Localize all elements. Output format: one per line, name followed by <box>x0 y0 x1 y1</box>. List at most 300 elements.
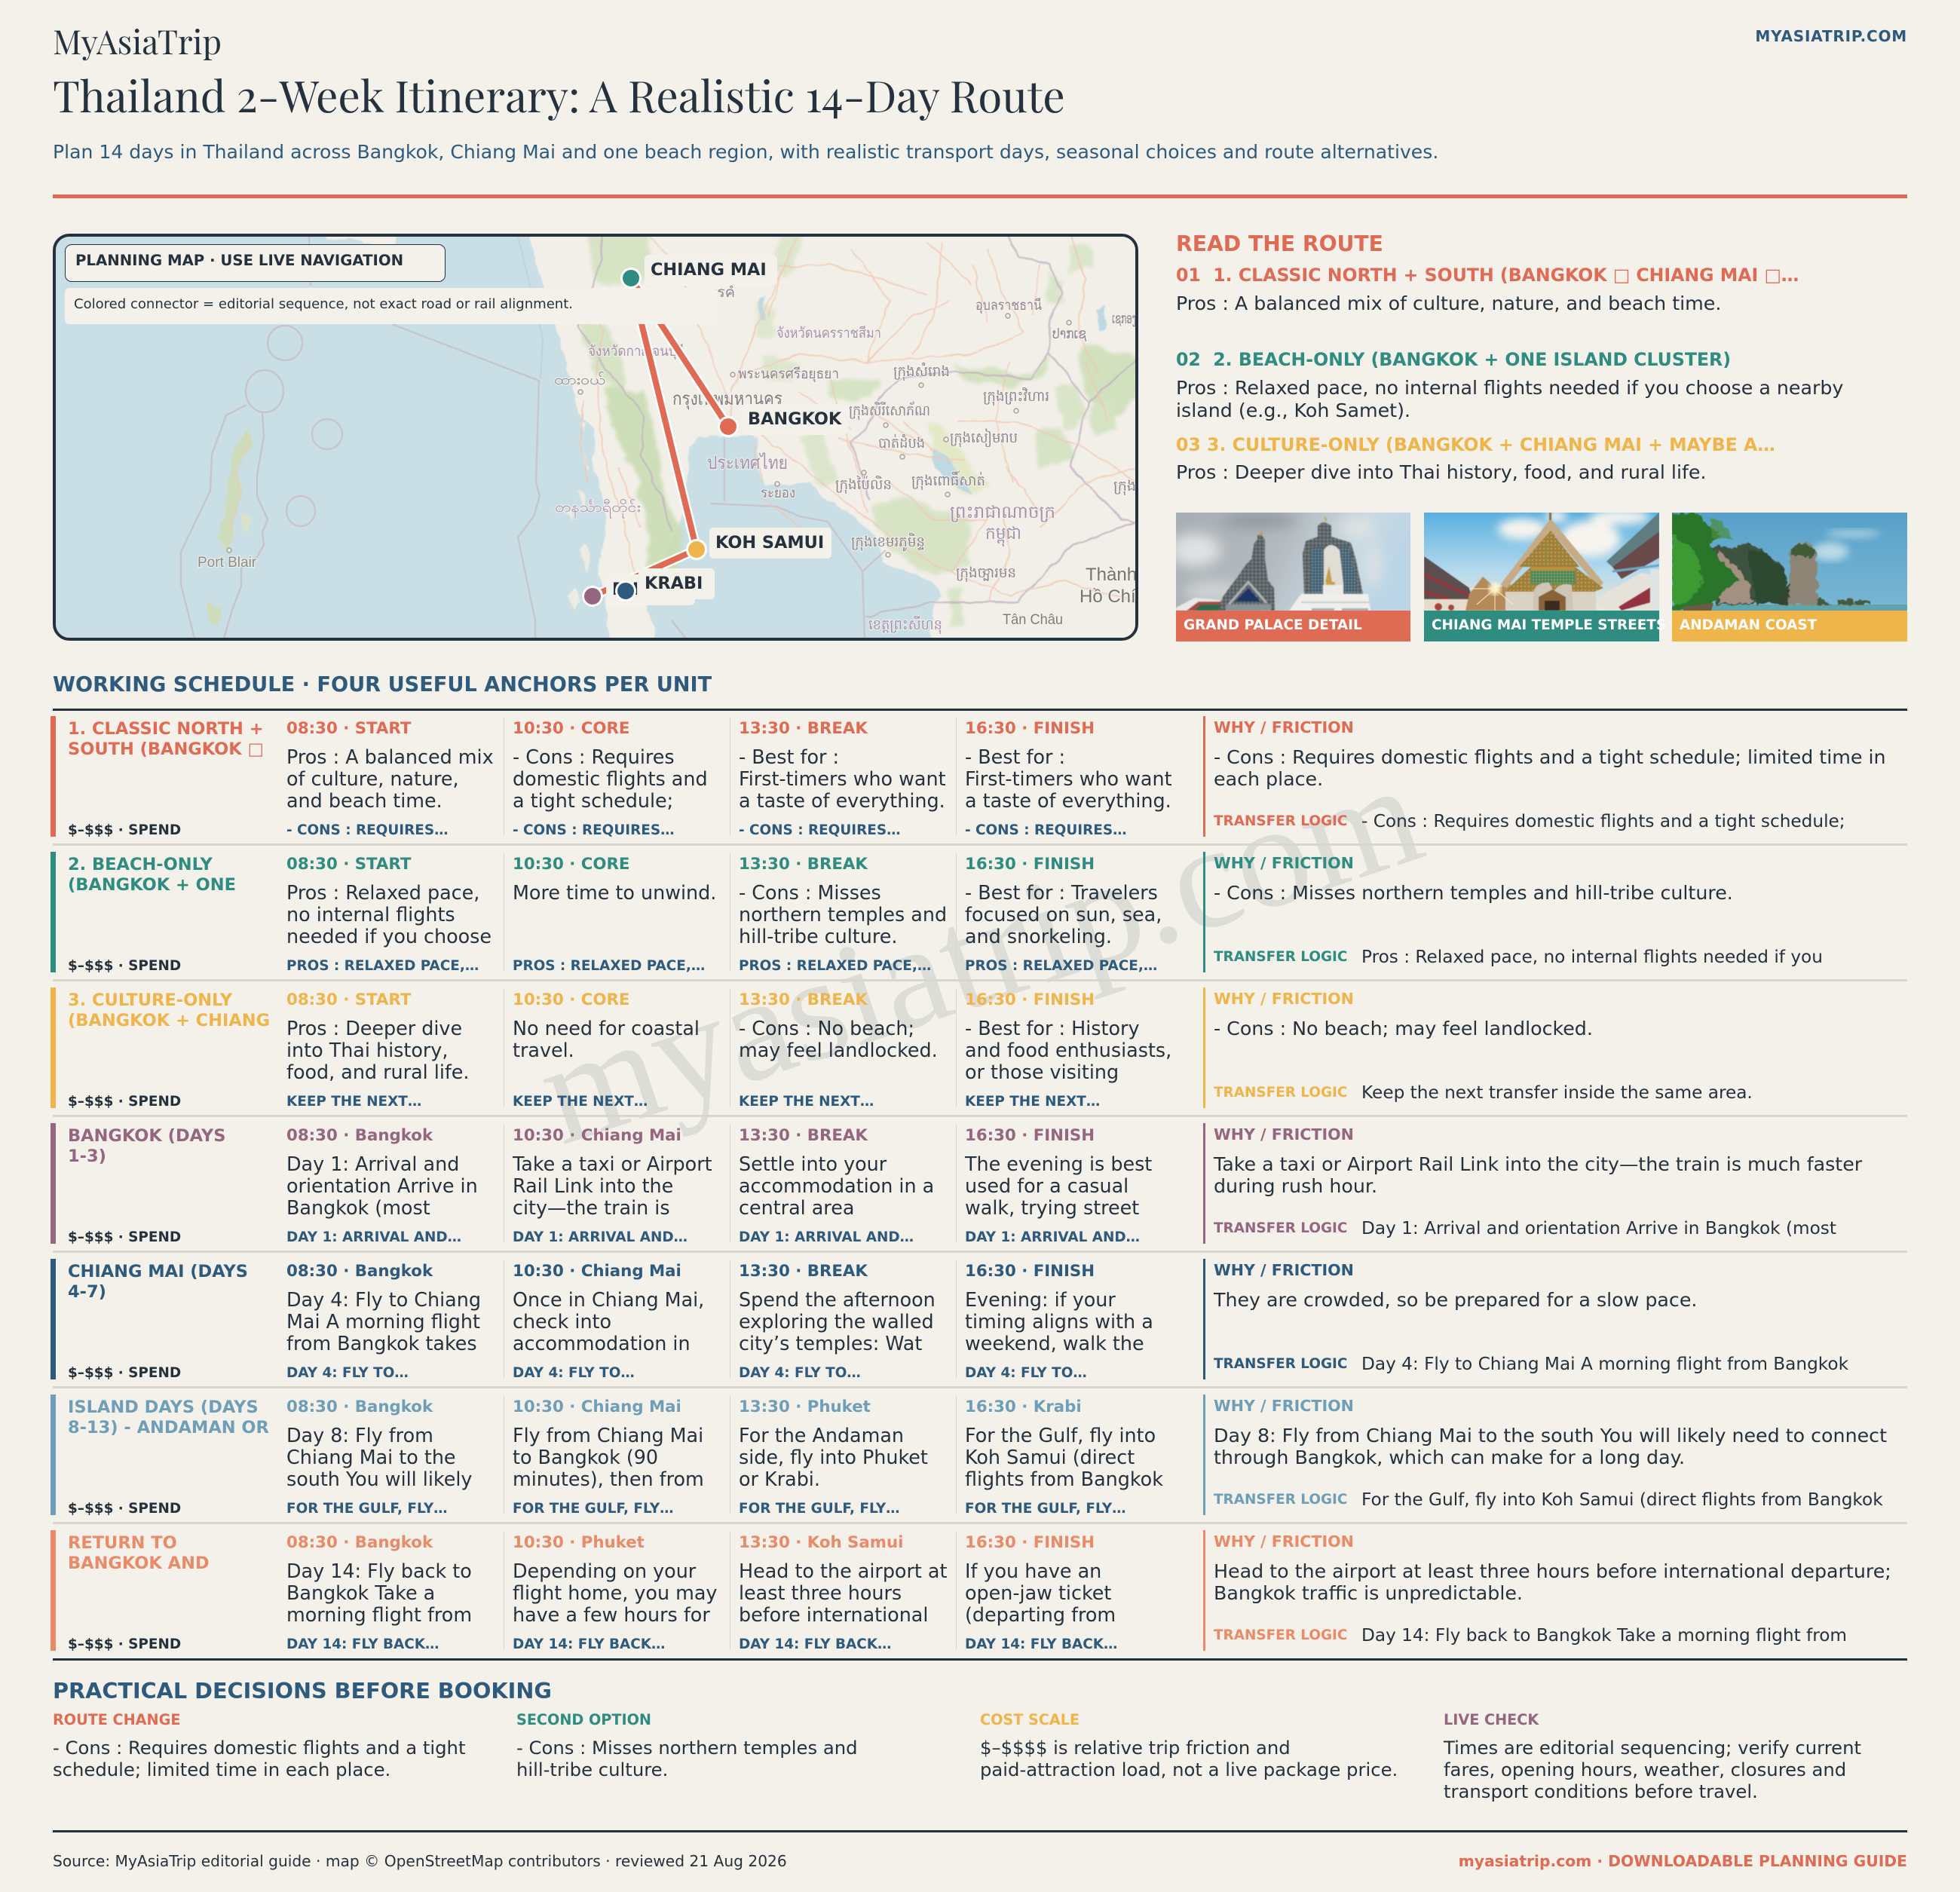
slot 13:30: 13:30 · BREAK <box>739 719 868 738</box>
slot 13:30: - Cons : No beach; <box>739 1017 914 1039</box>
photo card: Grand Palace <box>1176 513 1410 641</box>
schedule row 6 <box>51 1395 1907 1524</box>
why and transfer: Pros : Relaxed pace, no internal flights needed if you <box>1361 947 1823 967</box>
row label <box>68 1533 210 1573</box>
Tonle Sap lake and reservoirs <box>760 296 1107 494</box>
place names: ក្រុងសៀមរាប <box>950 428 1018 448</box>
slot 16:30: and snorkeling. <box>965 925 1112 948</box>
stop marker: Bangkok <box>718 416 739 437</box>
slot 10:30: Take a taxi or Airport <box>513 1153 712 1175</box>
slot 08:30: Bangkok (most <box>286 1196 430 1219</box>
slot 08:30: Mai A morning flight <box>286 1310 480 1333</box>
slot 13:30: city’s temples: Wat <box>739 1332 922 1355</box>
slot 16:30: PROS : RELAXED PACE,… <box>965 958 1157 974</box>
why and transfer: Day 1: Arrival and orientation Arrive in Bangkok (most <box>1361 1218 1836 1238</box>
schedule row 4 <box>51 1123 1907 1253</box>
slot 10:30 <box>504 1396 730 1514</box>
slot 13:30: before international <box>739 1603 928 1626</box>
row label: (BANGKOK + ONE <box>68 875 236 895</box>
slot 10:30: minutes), then from <box>513 1468 704 1490</box>
slot 08:30 <box>286 1126 478 1245</box>
row label <box>68 1126 225 1166</box>
slot 10:30: FOR THE GULF, FLY… <box>513 1501 674 1517</box>
schedule top rule <box>53 709 1907 710</box>
slot 08:30: Pros : Relaxed pace, <box>286 881 479 904</box>
slot 16:30: - CONS : REQUIRES… <box>965 822 1126 838</box>
slot 16:30 <box>956 1260 1182 1378</box>
header: site url: MYASIATRIP.COM <box>1755 27 1907 45</box>
row label: RETURN TO <box>68 1533 177 1553</box>
stop label: Koh Samui: KOH SAMUI <box>715 533 824 553</box>
schedule row 7 <box>51 1530 1891 1652</box>
slot 16:30: timing aligns with a <box>965 1310 1153 1333</box>
schedule row 3 <box>51 987 1907 1117</box>
slot 10:30: 10:30 · CORE <box>513 855 629 874</box>
slot 08:30: 08:30 · Bangkok <box>286 1398 433 1416</box>
slot 08:30: Chiang Mai to the <box>286 1446 456 1468</box>
land <box>207 219 1153 656</box>
row accent <box>51 987 56 1108</box>
photo: gilded temple facade under blue sky <box>1424 513 1659 611</box>
why and transfer: Take a taxi or Airport Rail Link into the city—the train is much faster <box>1214 1153 1862 1175</box>
slot 08:30: morning flight from <box>286 1603 472 1626</box>
slot 16:30: a taste of everything. <box>965 789 1171 812</box>
why and transfer: TRANSFER LOGIC <box>1214 1220 1347 1236</box>
stop label: Chiang Mai: CHIANG MAI <box>651 260 767 280</box>
slot 10:30: 10:30 · Chiang Mai <box>513 1126 681 1145</box>
place names: ປາກເຊ <box>1052 326 1087 342</box>
row accent <box>51 1259 56 1379</box>
slot 10:30: Fly from Chiang Mai <box>513 1424 703 1447</box>
slot 16:30 <box>956 718 1182 835</box>
why and transfer: TRANSFER LOGIC <box>1214 1356 1347 1372</box>
place names: Hồ Chí <box>1080 586 1136 607</box>
decision: cost scale: $–$$$$ is relative trip friction and <box>980 1737 1291 1759</box>
slot 16:30: DAY 4: FLY TO… <box>965 1365 1087 1381</box>
slot 16:30: KEEP THE NEXT… <box>965 1094 1100 1110</box>
slot 13:30: central area <box>739 1196 854 1219</box>
place names: พระนครศรีอยุธยา <box>738 366 839 383</box>
slot 10:30: Once in Chiang Mai, <box>513 1288 704 1311</box>
slot 16:30: 16:30 · FINISH <box>965 855 1095 874</box>
forest patches <box>578 226 1138 626</box>
row spend: $–$$$ · SPEND <box>68 1636 181 1652</box>
slot 10:30 <box>504 853 730 971</box>
decision: live check: fares, opening hours, weather, closures and <box>1444 1759 1846 1780</box>
place names: Thành <box>1086 565 1137 585</box>
map note: planning map tag <box>65 244 446 282</box>
subtitle: Plan 14 days in Thailand across Bangkok, Chiang Mai and one beach region, with realistic transport days, seasonal choices and route alternatives. <box>53 141 1438 163</box>
row label: BANGKOK (DAYS <box>68 1126 225 1146</box>
row label: 2. BEACH-ONLY <box>68 855 213 874</box>
slot 08:30 <box>286 719 494 838</box>
row label <box>68 719 264 759</box>
why and transfer: WHY / FRICTION <box>1214 990 1354 1008</box>
slot 08:30: south You will likely <box>286 1468 472 1490</box>
stop marker: Phuket <box>582 586 603 607</box>
slot 16:30: Evening: if your <box>965 1288 1116 1311</box>
slot 13:30: DAY 1: ARRIVAL AND… <box>739 1229 914 1245</box>
decision: route change: - Cons : Requires domestic flights and a tight <box>53 1737 466 1759</box>
slot 16:30: flights from Bangkok <box>965 1468 1163 1490</box>
row spend: $–$$$ · SPEND <box>68 822 181 838</box>
slot 13:30 <box>730 1125 956 1242</box>
decision: cost scale: COST SCALE <box>980 1711 1080 1728</box>
decision: live check <box>1443 1711 1861 1802</box>
slot 08:30 <box>286 855 492 974</box>
slot 10:30: to Bangkok (90 <box>513 1446 658 1468</box>
place names: ระยอง <box>761 485 795 501</box>
caption: CHIANG MAI TEMPLE STREETS <box>1432 617 1666 633</box>
place names: ក្រុងសំរោង <box>893 362 950 381</box>
slot 08:30: Day 14: Fly back to <box>286 1560 472 1582</box>
place names: ក្រុងសិរីសោភ័ណ <box>849 401 930 421</box>
why and transfer: WHY / FRICTION <box>1214 1125 1354 1143</box>
slot 13:30: - CONS : REQUIRES… <box>739 822 900 838</box>
slot 16:30: DAY 1: ARRIVAL AND… <box>965 1229 1140 1245</box>
slot 16:30: If you have an <box>965 1560 1101 1582</box>
place names: ក្រុងប៉ៃលិន <box>835 475 892 494</box>
route 1 text: Pros : A balanced mix of culture, nature, and beach time. <box>1176 292 1721 314</box>
slot 16:30: focused on sun, sea, <box>965 903 1162 926</box>
decision: live check: LIVE CHECK <box>1444 1711 1539 1728</box>
slot 08:30: Day 4: Fly to Chiang <box>286 1288 481 1311</box>
row accent <box>51 852 56 972</box>
islands <box>219 427 252 553</box>
caption <box>1176 611 1410 641</box>
row label <box>68 1262 248 1302</box>
place names: ក្រុងច្បារមន <box>956 565 1016 583</box>
slot 08:30: Pros : A balanced mix <box>286 745 494 768</box>
slot 13:30: side, fly into Phuket <box>739 1446 928 1468</box>
row label: 4-7) <box>68 1282 106 1302</box>
decision: route change: ROUTE CHANGE <box>53 1711 180 1728</box>
slot 13:30: - Cons : Misses <box>739 881 881 904</box>
why and transfer <box>1203 1259 1907 1379</box>
slot 08:30: food, and rural life. <box>286 1061 470 1083</box>
row label: BANGKOK AND <box>68 1554 210 1573</box>
slot 10:30: 10:30 · Phuket <box>513 1533 645 1552</box>
slot 08:30: Pros : Deeper dive <box>286 1017 462 1039</box>
route 3 title: 03 3. CULTURE-ONLY (BANGKOK + CHIANG MAI + MAYBE A… <box>1176 434 1775 455</box>
slot 10:30 <box>504 1532 730 1649</box>
place names: တနင်္သာရီတိုင်း <box>555 498 641 519</box>
slot 10:30 <box>504 989 730 1107</box>
why and transfer: Keep the next transfer inside the same area. <box>1361 1082 1753 1103</box>
row label: 3. CULTURE-ONLY <box>68 990 232 1010</box>
slot 13:30: accommodation in a <box>739 1174 934 1197</box>
why and transfer: WHY / FRICTION <box>1214 718 1354 736</box>
why and transfer <box>1203 716 1907 837</box>
route 1 title: 01 1. CLASSIC NORTH + SOUTH (BANGKOK □ CHIANG MAI □… <box>1176 265 1799 286</box>
slot 13:30: a taste of everything. <box>739 789 945 812</box>
slot 08:30 <box>286 1262 481 1381</box>
slot 08:30 <box>286 1398 472 1517</box>
slot 10:30: 10:30 · Chiang Mai <box>513 1398 681 1416</box>
route 2 title: 02 2. BEACH-ONLY (BANGKOK + ONE ISLAND CLUSTER) <box>1176 349 1731 370</box>
why and transfer: WHY / FRICTION <box>1214 1261 1354 1279</box>
slot 16:30: 16:30 · FINISH <box>965 990 1095 1009</box>
slot 10:30 <box>504 1125 730 1242</box>
caption: GRAND PALACE DETAIL <box>1184 617 1362 633</box>
slot 10:30: have a few hours for <box>513 1603 710 1626</box>
slot 08:30: 08:30 · START <box>286 990 411 1009</box>
slot 13:30 <box>730 718 956 835</box>
slot 08:30: orientation Arrive in <box>286 1174 478 1197</box>
schedule row 1 <box>51 716 1907 846</box>
slot 13:30: least three hours <box>739 1581 902 1604</box>
row accent <box>51 1123 56 1244</box>
why and transfer <box>1203 1530 1907 1651</box>
slot 08:30: Day 1: Arrival and <box>286 1153 459 1175</box>
slot 16:30: - Best for : History <box>965 1017 1139 1039</box>
header rule <box>53 194 1907 198</box>
slot 13:30: Settle into your <box>739 1153 887 1175</box>
why and transfer: - Cons : Misses northern temples and hill-tribe culture. <box>1214 882 1733 904</box>
slot 10:30: 10:30 · CORE <box>513 990 629 1009</box>
caption: ANDAMAN COAST <box>1680 617 1817 633</box>
slot 08:30: from Bangkok takes <box>286 1332 477 1355</box>
why and transfer <box>1203 1123 1907 1244</box>
slot 13:30: KEEP THE NEXT… <box>739 1094 874 1110</box>
why and transfer: They are crowded, so be prepared for a slow pace. <box>1214 1289 1697 1311</box>
slot 16:30 <box>956 1396 1182 1514</box>
why and transfer <box>1203 987 1907 1108</box>
slot 13:30 <box>730 1396 956 1514</box>
place names: จังหวัดกาญจนบุรี <box>588 343 684 360</box>
slot 10:30: flight home, you may <box>513 1581 717 1604</box>
stop label: Phuket <box>606 574 695 605</box>
slot 10:30: travel. <box>513 1039 574 1061</box>
place names: ក្រុង <box>1113 479 1136 496</box>
slot 16:30: (departing from <box>965 1603 1116 1626</box>
slot 16:30: FOR THE GULF, FLY… <box>965 1501 1126 1517</box>
slot 10:30: KEEP THE NEXT… <box>513 1094 648 1110</box>
slot 16:30: For the Gulf, fly into <box>965 1424 1156 1447</box>
caption <box>1672 611 1907 641</box>
place names: ព្រះរាជាណាចក្រ <box>950 502 1055 522</box>
roads <box>231 234 1138 603</box>
row label: 8-13) - ANDAMAN OR <box>68 1418 269 1437</box>
slot 16:30 <box>956 853 1182 971</box>
slot 13:30: or Krabi. <box>739 1468 820 1490</box>
slot 08:30: 08:30 · Bangkok <box>286 1126 433 1145</box>
slot 13:30 <box>730 989 956 1107</box>
slot 13:30: 13:30 · BREAK <box>739 1126 868 1145</box>
section heading: practical decisions: PRACTICAL DECISIONS BEFORE BOOKING <box>53 1678 552 1704</box>
slot 13:30: First-timers who want <box>739 767 946 790</box>
place names: กรุงเทพมหานคร <box>672 389 782 410</box>
slot 13:30 <box>730 1532 956 1649</box>
slot 08:30 <box>286 990 470 1110</box>
slot 08:30: into Thai history, <box>286 1039 448 1061</box>
why and transfer: each place. <box>1214 768 1323 790</box>
slot 13:30: - Best for : <box>739 745 839 768</box>
slot 13:30: exploring the walled <box>739 1310 934 1333</box>
row accent <box>51 1395 56 1515</box>
caption <box>1424 611 1659 641</box>
slot 16:30: walk, trying street <box>965 1196 1139 1219</box>
slot 08:30: - CONS : REQUIRES… <box>286 822 448 838</box>
row label <box>68 1398 269 1437</box>
slot 10:30: - Cons : Requires <box>513 745 675 768</box>
why and transfer: Day 8: Fly from Chiang Mai to the south You will likely need to connect <box>1214 1425 1887 1447</box>
why and transfer: - Cons : Requires domestic flights and a tight schedule; limited time in <box>1214 746 1886 768</box>
footer: source: Source: MyAsiaTrip editorial guide · map © OpenStreetMap contributors · reviewed 21 Aug 2026 <box>53 1852 787 1870</box>
place names: ក្រុងព្រះវិហារ <box>983 387 1049 406</box>
slot 10:30 <box>504 718 730 835</box>
slot 08:30: DAY 1: ARRIVAL AND… <box>286 1229 461 1245</box>
why and transfer: Day 4: Fly to Chiang Mai A morning flight from Bangkok <box>1361 1354 1848 1374</box>
row label: 1. CLASSIC NORTH + <box>68 719 264 739</box>
slot 08:30: PROS : RELAXED PACE,… <box>286 958 479 974</box>
stop label: Phuket: PHUKET <box>612 580 688 599</box>
row spend: $–$$$ · SPEND <box>68 1229 181 1245</box>
slot 10:30: city—the train is <box>513 1196 670 1219</box>
slot 16:30: 16:30 · FINISH <box>965 1262 1095 1281</box>
place names: ထားဝယ် <box>554 371 605 388</box>
place names: จังหวัดนครราชสีมา <box>776 325 881 341</box>
route 2 text: island (e.g., Koh Samet). <box>1176 400 1410 421</box>
why and transfer: WHY / FRICTION <box>1214 1532 1354 1551</box>
decision: route change: schedule; limited time in each place. <box>53 1759 390 1780</box>
slot 10:30: 10:30 · CORE <box>513 719 629 738</box>
stop label: Bangkok: BANGKOK <box>748 409 841 429</box>
small town dots <box>227 314 1071 574</box>
why and transfer: TRANSFER LOGIC <box>1214 813 1347 829</box>
slot 16:30: Koh Samui (direct <box>965 1446 1135 1468</box>
stop label: Krabi: KRABI <box>645 574 703 593</box>
slot 13:30: PROS : RELAXED PACE,… <box>739 958 931 974</box>
slot 16:30: First-timers who want <box>965 767 1172 790</box>
slot 13:30: For the Andaman <box>739 1424 904 1447</box>
slot 13:30: 13:30 · BREAK <box>739 855 868 874</box>
slot 08:30 <box>286 1533 472 1652</box>
schedule bottom rule <box>53 1658 1907 1661</box>
why and transfer: through Bangkok, which can make for a long day. <box>1214 1447 1685 1468</box>
borders <box>578 234 1138 617</box>
place names: Tân Châu <box>1003 612 1063 628</box>
place names: อุบลราชธานี <box>975 297 1042 314</box>
row accent <box>51 716 56 837</box>
why and transfer: WHY / FRICTION <box>1214 1397 1354 1415</box>
route 3 text: Pros : Deeper dive into Thai history, food, and rural life. <box>1176 461 1707 483</box>
row label: SOUTH (BANGKOK □ <box>68 739 264 759</box>
slot 13:30: 13:30 · BREAK <box>739 990 868 1009</box>
slot 13:30: hill-tribe culture. <box>739 925 897 948</box>
stop marker: Krabi <box>615 580 636 602</box>
decision: route change <box>53 1711 466 1780</box>
slot 16:30: or those visiting <box>965 1061 1119 1083</box>
slot 13:30 <box>730 853 956 971</box>
slot 08:30: 08:30 · Bangkok <box>286 1262 433 1281</box>
map note: connector explanation: Colored connector = editorial sequence, not exact road or rail alignment. <box>74 296 573 312</box>
why and transfer: TRANSFER LOGIC <box>1214 1627 1347 1643</box>
slot 16:30: 16:30 · FINISH <box>965 1533 1095 1552</box>
stop marker: Koh Samui <box>686 539 707 560</box>
slot 10:30: Depending on your <box>513 1560 696 1582</box>
stop label: Krabi <box>639 568 715 599</box>
header: brand name: MyAsiaTrip <box>53 19 222 63</box>
row label: CHIANG MAI (DAYS <box>68 1262 248 1281</box>
row spend: $–$$$ · SPEND <box>68 958 181 974</box>
place names: បាត់ដំបង <box>878 433 925 452</box>
slot 16:30: 16:30 · FINISH <box>965 719 1095 738</box>
watermark: myasiatrip.com <box>520 730 1440 1176</box>
slot 08:30: no internal flights <box>286 903 455 926</box>
slot 16:30 <box>956 1532 1182 1649</box>
map note: planning map tag: PLANNING MAP · USE LIVE NAVIGATION <box>75 252 403 269</box>
heading: READ THE ROUTE <box>1176 231 1383 256</box>
route 2 text: Pros : Relaxed pace, no internal flights needed if you choose a nearby <box>1176 377 1843 399</box>
panel: read the route <box>1176 231 1843 483</box>
row spend: $–$$$ · SPEND <box>68 1501 181 1517</box>
place names: Port Blair <box>198 555 257 571</box>
schedule row 2 <box>51 852 1907 981</box>
map note: connector explanation <box>65 288 717 324</box>
slot 16:30: - Best for : Travelers <box>965 881 1158 904</box>
slot 08:30: needed if you choose <box>286 925 492 948</box>
why and transfer: Day 14: Fly back to Bangkok Take a morning flight from <box>1361 1625 1847 1646</box>
decision: second option: - Cons : Misses northern temples and <box>516 1737 858 1759</box>
slot 13:30: FOR THE GULF, FLY… <box>739 1501 900 1517</box>
slot 08:30: and beach time. <box>286 789 443 812</box>
decision: live check: Times are editorial sequencing; verify current <box>1444 1737 1861 1759</box>
decision: live check: transport conditions before travel. <box>1444 1780 1758 1802</box>
slot 08:30: 08:30 · Bangkok <box>286 1533 433 1552</box>
photo card: Chiang Mai temple <box>1424 513 1666 641</box>
slot 13:30 <box>730 1260 956 1378</box>
row label: ISLAND DAYS (DAYS <box>68 1398 259 1417</box>
slot 13:30: Head to the airport at <box>739 1560 947 1582</box>
slot 13:30: DAY 4: FLY TO… <box>739 1365 861 1381</box>
slot 10:30: DAY 14: FLY BACK… <box>513 1636 665 1652</box>
slot 08:30: of culture, nature, <box>286 767 459 790</box>
why and transfer: - Cons : Requires domestic flights and a tight schedule; <box>1361 811 1845 831</box>
photo: limestone karst and sea <box>1672 513 1907 611</box>
photo card: Andaman coast <box>1672 513 1907 641</box>
route 2 text <box>1176 377 1843 421</box>
slot 10:30: check into <box>513 1310 611 1333</box>
slot 16:30 <box>956 989 1182 1107</box>
schedule row 5 <box>51 1259 1907 1388</box>
slot 13:30: DAY 14: FLY BACK… <box>739 1636 891 1652</box>
row label: 1-3) <box>68 1147 106 1166</box>
place names: นครสวรรค์ <box>663 284 735 301</box>
row spend: $–$$$ · SPEND <box>68 1094 181 1110</box>
why and transfer: TRANSFER LOGIC <box>1214 1492 1347 1508</box>
slot 08:30: KEEP THE NEXT… <box>286 1094 421 1110</box>
section heading: working schedule: WORKING SCHEDULE · FOUR USEFUL ANCHORS PER UNIT <box>53 673 712 696</box>
slot 13:30: Spend the afternoon <box>739 1288 936 1311</box>
slot 16:30: The evening is best <box>965 1153 1152 1175</box>
slot 10:30: domestic flights and <box>513 767 708 790</box>
slot 10:30: 10:30 · Chiang Mai <box>513 1262 681 1281</box>
slot 08:30: DAY 14: FLY BACK… <box>286 1636 439 1652</box>
slot 16:30: used for a casual <box>965 1174 1129 1197</box>
slot 10:30: Rail Link into the <box>513 1174 673 1197</box>
place names: ក្រុងខេមរភូមិន្ទ <box>851 532 925 552</box>
panel: planning map <box>53 234 1138 641</box>
decision: second option: SECOND OPTION <box>516 1711 651 1728</box>
decision: second option: hill-tribe culture. <box>516 1759 668 1780</box>
place names: ខេត្តព្រះសីហនុ <box>868 615 942 635</box>
map base: land, forest, roads, borders, place names <box>56 237 1137 638</box>
stop label: Bangkok <box>742 404 848 435</box>
slot 13:30: may feel landlocked. <box>739 1039 938 1061</box>
slot 08:30: DAY 4: FLY TO… <box>286 1365 409 1381</box>
slot 10:30: DAY 4: FLY TO… <box>513 1365 635 1381</box>
